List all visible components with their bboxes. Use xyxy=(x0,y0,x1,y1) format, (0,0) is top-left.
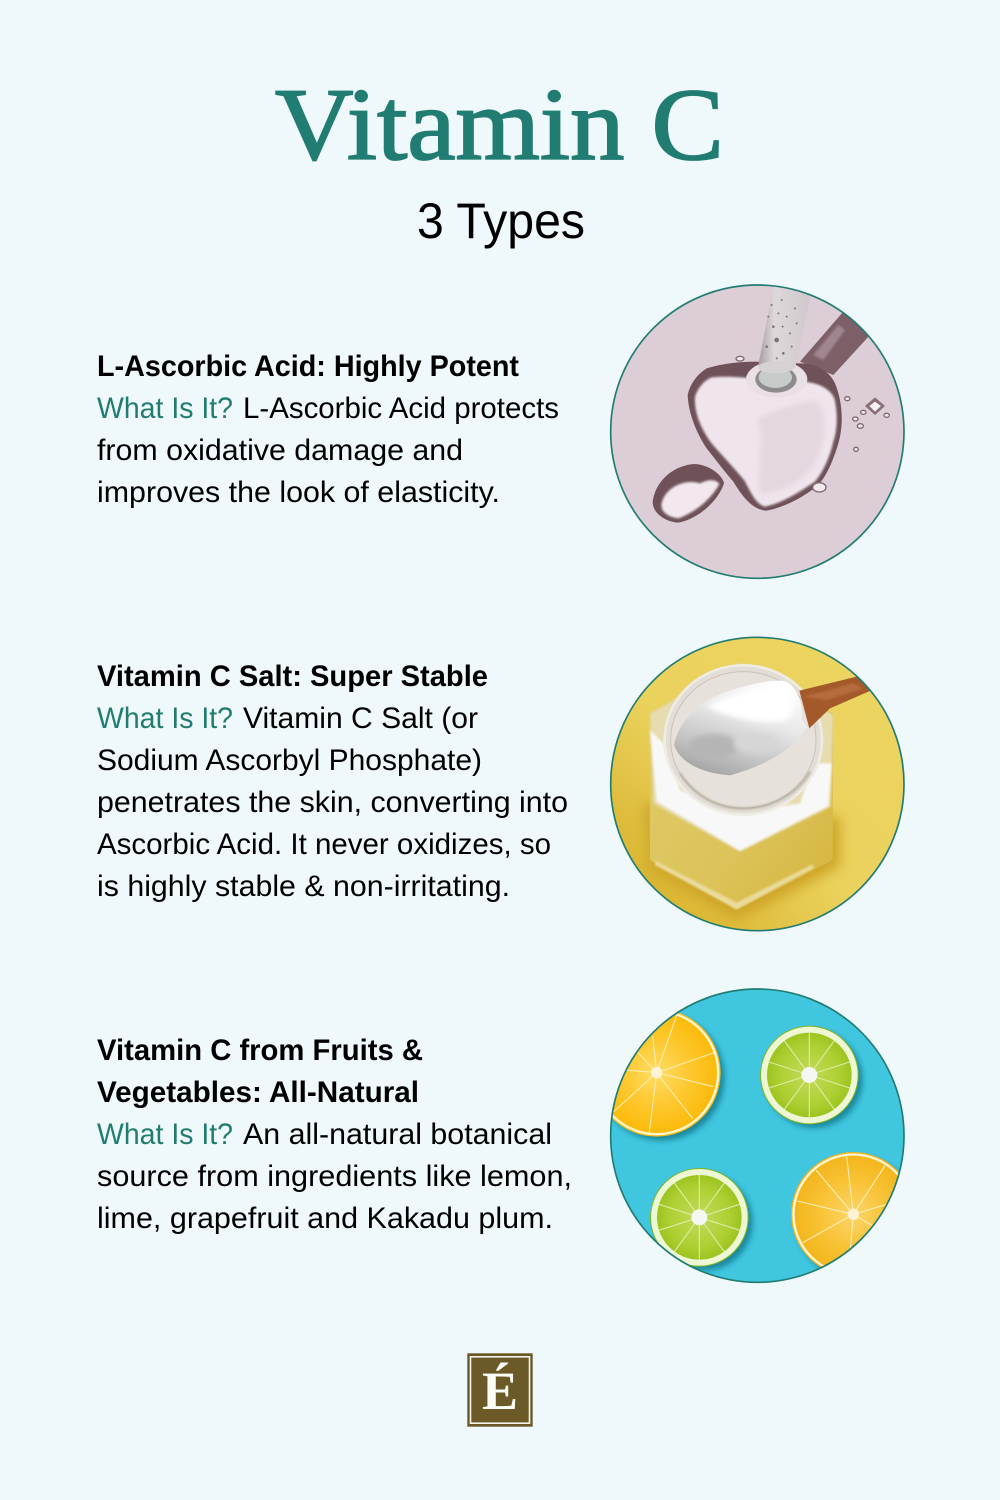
heading: Vitamin C from Fruits and Vegetables xyxy=(97,1034,423,1109)
panel: Fruits and Vegetables text xyxy=(97,1034,572,1235)
small puddle xyxy=(653,464,724,523)
description: Vitamin C Salt xyxy=(97,702,568,903)
label: What Is It?: What Is It? xyxy=(97,392,233,425)
panel: L-Ascorbic Acid text xyxy=(97,350,559,509)
heading: L-Ascorbic Acid: L-Ascorbic Acid: Highly Potent xyxy=(97,350,519,383)
powder inside jar xyxy=(650,730,832,851)
dropper tip pool xyxy=(746,364,808,384)
puddle xyxy=(688,362,842,511)
panel: Vitamin C Salt text xyxy=(97,660,568,903)
subtitle: 3 Types xyxy=(417,193,585,249)
description: L-Ascorbic Acid xyxy=(97,392,559,509)
spoon of powder xyxy=(674,681,807,775)
jar body xyxy=(650,710,833,910)
description: L-Ascorbic Acid: L-Ascorbic Acid protects xyxy=(243,392,559,425)
dropper shadow xyxy=(800,312,870,375)
jar upper glass xyxy=(650,663,833,852)
label: What Is It?: What Is It? xyxy=(97,1118,233,1151)
heading: Vitamin C Salt: Vitamin C Salt: Super Stable xyxy=(97,660,488,693)
heading: Vitamin C from Fruits and Vegetables: Vegetables: All-Natural xyxy=(97,1076,419,1109)
description: fruits and vegetables: source from ingredients like lemon, xyxy=(97,1160,572,1193)
title: Vitamin C xyxy=(275,68,724,182)
droplets xyxy=(736,356,889,492)
jar shadow xyxy=(643,803,840,920)
orange slice top left xyxy=(612,1012,721,1137)
orange slice bottom right xyxy=(791,1152,899,1268)
heading: Vitamin C from Fruits and Vegetables: Vitamin C from Fruits & xyxy=(97,1034,423,1067)
image: powder jar with wooden spoon xyxy=(610,636,905,932)
description: L-Ascorbic Acid: from oxidative damage and xyxy=(97,434,463,467)
description: L-Ascorbic Acid: improves the look of elasticity. xyxy=(97,476,500,509)
description: Vitamin C Salt: is highly stable & non-irritating. xyxy=(97,870,510,903)
description: Vitamin C Salt: Ascorbic Acid. It never oxidizes, so xyxy=(97,828,551,861)
lime slice bottom left xyxy=(650,1168,749,1267)
description: fruits and vegetables xyxy=(97,1118,572,1235)
description: Vitamin C Salt: penetrates the skin, converting into xyxy=(97,786,568,819)
dropper glass xyxy=(758,287,811,368)
image: serum puddle with dropper xyxy=(610,284,905,580)
logo: brand mark xyxy=(467,1353,533,1427)
citrus shadows xyxy=(612,1016,899,1274)
image: citrus slices on blue xyxy=(610,988,905,1284)
label: What Is It?: What Is It? xyxy=(97,702,233,735)
glass mouth xyxy=(665,665,822,815)
spoon handle xyxy=(799,677,871,728)
infographic canvas xyxy=(97,90,905,1427)
lime slice top right xyxy=(760,1026,859,1124)
description: fruits and vegetables: lime, grapefruit and Kakadu plum. xyxy=(97,1202,553,1235)
logo: brand mark: É xyxy=(482,1361,518,1421)
description: Vitamin C Salt: Sodium Ascorbyl Phosphate) xyxy=(97,744,482,777)
description: Vitamin C Salt: Vitamin C Salt (or xyxy=(243,702,478,735)
description: fruits and vegetables: An all-natural botanical xyxy=(243,1118,552,1151)
